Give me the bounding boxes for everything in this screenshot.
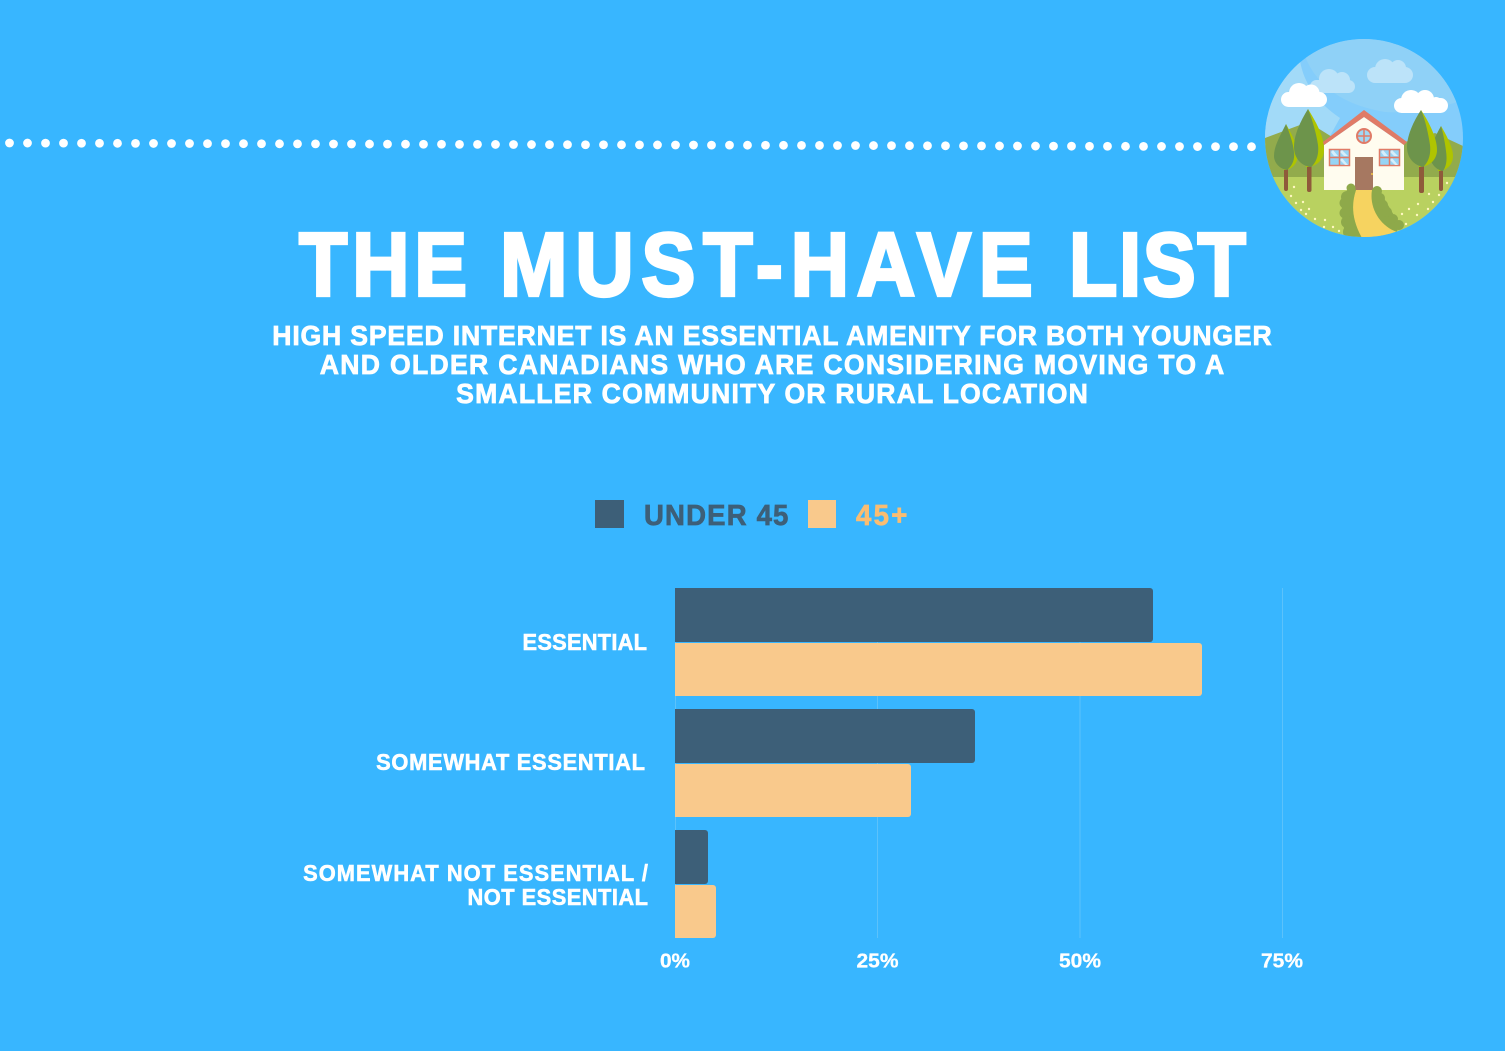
- title: LIST: [1069, 214, 1246, 315]
- icon: flowers: [1290, 182, 1448, 232]
- category labels: SOMEWHAT ESSENTIAL: [376, 749, 645, 775]
- axis labels: 0%: [660, 950, 690, 972]
- legend: [595, 498, 907, 531]
- axis labels: 75%: [1261, 950, 1303, 972]
- axis labels: 25%: [856, 950, 899, 972]
- axis labels: [660, 950, 1303, 972]
- bars: somewhat not essential: [675, 830, 716, 938]
- icon: house: [1323, 110, 1407, 190]
- category labels: NOT ESSENTIAL: [467, 884, 648, 910]
- category labels: [303, 629, 649, 910]
- subtitle: SMALLER COMMUNITY OR RURAL LOCATION: [456, 377, 1088, 409]
- category labels: SOMEWHAT NOT ESSENTIAL /: [303, 860, 649, 886]
- icon: garden path and bushes: [1340, 184, 1404, 240]
- icon: clouds: [1281, 59, 1448, 113]
- legend: 45+: [856, 498, 907, 531]
- title: [299, 214, 1246, 315]
- subtitle: HIGH SPEED INTERNET IS AN ESSENTIAL AMENITY FOR BOTH YOUNGER: [272, 319, 1272, 351]
- bars: somewhat essential: [675, 709, 975, 817]
- legend: UNDER 45: [644, 498, 788, 531]
- category labels: ESSENTIAL: [523, 629, 647, 655]
- icon: house in circular landscape: [1265, 39, 1463, 240]
- icon: hills: [1265, 122, 1463, 190]
- axis labels: 50%: [1059, 950, 1101, 972]
- subtitle: AND OLDER CANADIANS WHO ARE CONSIDERING MOVING TO A: [320, 348, 1224, 380]
- title: MUST-HAVE: [500, 215, 1033, 315]
- title: THE: [299, 214, 467, 315]
- subtitle: [272, 319, 1272, 409]
- icon: trees: [1274, 109, 1453, 193]
- bars: essential: [675, 588, 1202, 696]
- bar chart: [303, 588, 1303, 972]
